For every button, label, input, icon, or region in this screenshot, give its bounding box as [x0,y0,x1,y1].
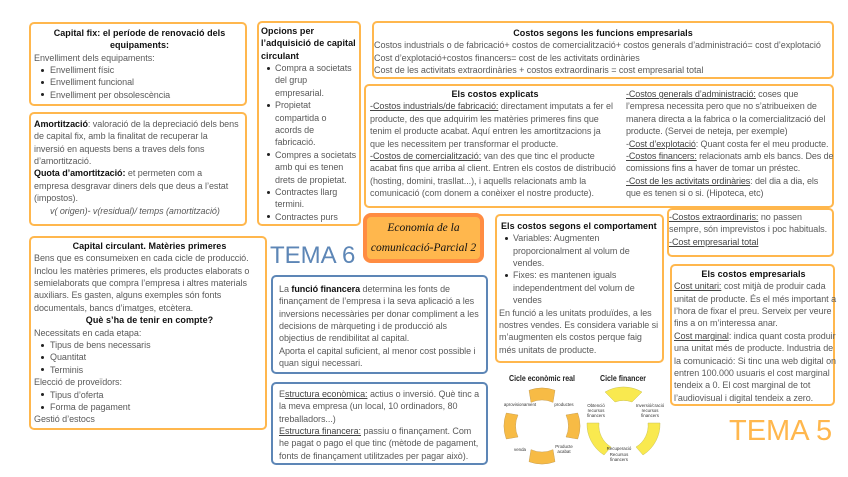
panel: opcions adquisició: amb qui es tenen [275,162,343,172]
panel: costos segons el comportament: Fixes: es mantenen iguals [513,270,616,280]
heading: capital fix: equipaments: [110,40,169,50]
chart: cicle financer: Recuperació [607,446,632,451]
column: explicats esquerra [370,89,616,198]
panel: opcions adquisició: compartida o [275,113,326,123]
panel: opcions adquisició: Propietat [275,100,311,110]
chart: cicle econòmic real: productes [554,402,574,407]
panel: opcions adquisició: empresarial. [275,88,324,98]
panel: capital circulant: documentals, bancs d’imatges, etcètera. [34,303,193,313]
heading: capital fix [54,28,225,50]
chart: cicle econòmic real: acabat [557,449,571,454]
list: envelliment: Envelliment funcional [50,77,134,87]
panel: amortització: Quota d’amortització: et permeten com a [34,168,202,178]
panel: costos segons el comportament: m’augmenten els costos perque faig [499,332,642,342]
panel: els costos empresarials: l’hora de fixar el preu. Serveix per veure [674,306,831,316]
heading: opcions: circulant [261,51,299,61]
panel: costos segons el comportament: independentment del volum de [513,283,635,293]
panel: opcions adquisició: Contractes purs [275,212,338,222]
column: explicats esquerra: -Costos industrials/de fabricació: directament imputats a fer el [370,101,613,111]
panel: opcions adquisició: Compres a societats [275,150,356,160]
panel: estructura econòmica i financera: Estructura financera: passiu o finançament. Com [279,426,471,436]
panel: costos segons les funcions empresarials: Cost de les activitats extraordinàries + costos extraordinaris = cost empresarial total [374,65,703,75]
heading: comportament: Els costos segons el comportament [501,221,657,231]
chart: cicle financer: Inversió/cració [636,403,665,408]
panel: opcions adquisició: Compra a societats [275,63,352,73]
panel: amortització: v( origen)- v(residual)/ temps (amortització) [50,206,220,216]
list: envelliment: Envelliment per obsolescència [50,90,170,100]
title: economia de la comunicació: Economia de la [387,222,460,234]
panel: capital circulant [29,236,267,430]
heading: costos empresarials: Els costos empresarials [701,269,806,279]
panel: opcions adquisició: acords de [275,125,314,135]
panel: capital circulant: Necessitats en cada etapa: [34,328,141,338]
panel: costos extraordinaris: sempre, són imprevistos i poc habituals. [669,224,827,234]
panel: amortització: (impostos). [34,193,78,203]
chart: cicle financer: financers [610,457,629,462]
panel: capital circulant: semielaborats que compra l’empresa i altres materials [34,278,247,288]
heading: cicle econòmic real: Cicle econòmic real [509,373,575,383]
panel: els costos empresarials: unitat de producte. És el més important a [674,294,836,304]
panel: capital circulant: Tipus d’oferta [50,390,104,400]
panel: funció financera: inversions necessàries per donar compliment a les [279,309,479,319]
heading: capital fix: Capital fix: el període de renovació dels [54,28,225,38]
chart: cicle financer: financers [587,413,606,418]
heading: opcions: Opcions per [261,26,314,36]
panel: costos extraordinaris: -Cost empresarial total [669,237,758,247]
column: explicats dreta: producte. (Servei de neteja, per exemple) [626,126,788,136]
heading: opcions: l’adquisició de capital [261,38,356,48]
chart: cicle financer: financers [641,413,660,418]
heading: tema 6: TEMA 6 [270,242,355,269]
panel: funció financera [271,275,488,374]
panel: costos segons el comportament: proporcionalment al volum de [513,246,630,256]
column: explicats esquerra: tenim el producte acabat. Aquí entren les amortitzacions ja [370,126,601,136]
column: explicats dreta: que es tenen si o si. (Hipoteca, etc) [626,188,763,198]
panel: costos segons el comportament: més unitats de producte. [499,345,596,355]
chart: cicle econòmic real [504,373,580,464]
column: explicats dreta: manera directa a la fabrica o la comercialització del [626,114,825,124]
chart: cicle econòmic real: venda [514,447,527,452]
panel: funció financera: Aporta el capital suficient, al menor cost possible i [279,346,475,356]
chart: cicle econòmic real: Producte [555,444,573,449]
panel: costos extraordinaris [667,208,834,257]
chart: cicle financer: Obtenció [587,403,605,408]
column: explicats dreta: comissions fins a haver de tomar un préstec. [626,163,800,173]
heading: cicle financer: Cicle financer [600,373,647,383]
panel: els costos empresarials: Cost unitari: cost mitjà de produir cada [674,281,826,291]
panel: capital circulant: Quantitat [50,352,86,362]
chart: cicle financer [587,373,665,462]
panel: estructura econòmica i financera [271,382,488,465]
panel: opcions adquisició [257,21,361,226]
panel: costos segons el comportament: Variables: Augmenten [513,233,599,243]
panel: els costos empresarials: Cost marginal: indica quant costa produir [674,331,836,341]
panel: estructura econòmica i financera: treballadors...) [279,414,336,424]
panel: funció financera: quan sigui necessari. [279,358,363,368]
panel: capital circulant: Inclou les matèries primeres, els productes elaborats o [34,266,249,276]
column: explicats dreta: -Costos generals d’administració: coses que [626,89,798,99]
heading: opcions [261,26,356,61]
list: envelliment [41,65,170,100]
panel: els costos empresarials [670,264,835,406]
panel: els costos empresarials: fins a on m’interessa anar. [674,318,778,328]
heading: tema 5: TEMA 5 [729,415,832,447]
panel: opcions adquisició: del grup [275,75,307,85]
panel: opcions adquisició: termini. [275,199,304,209]
panel: costos segons el comportament: nostres vendes. Es considera variable si [499,320,658,330]
column: explicats dreta: -Cost de les activitats ordinàries: del dia a dia, els [626,176,818,186]
panel: els costos empresarials: l’audiovisual i digital tendeix a zero. [674,393,813,403]
panel: capital circulant: Forma de pagament [50,402,130,412]
chart: cicle financer: Recursos [610,452,629,457]
panel: costos segons les funcions empresarials [372,21,834,79]
column: explicats esquerra: que les necessitem per transformar el producte. [370,139,558,149]
panel: funció financera: La funció financera determina les fonts de [279,284,450,294]
panel: costos segons el comportament [495,214,664,363]
panel: capital circulant: Elecció de proveïdors: [34,377,122,387]
panel: costos segons les funcions empresarials: Cost d’explotació+costos financers= cost de les activitats ordinàries [374,53,640,63]
panel: els costos empresarials: tendeix a 0. El cost marginal de tot [674,380,810,390]
panel: capital circulant: Tipus de bens necessaris [50,340,151,350]
column: explicats esquerra: -Costos de comercialització: van des que tinc el producte [370,151,595,161]
panel: capital circulant: Gestió d’estocs [34,414,95,424]
panel: estructura econòmica i financera: la meva empresa (un local, 10 ordinadors, 80 [279,401,457,411]
panel: els costos empresarials: la comunicació: Si tinc una web digital on [674,356,836,366]
panel: estructura econòmica i financera: Estructura econòmica: actius o inversió. Què tinc a [279,389,479,399]
heading: què s'ha de tenir en compte: Què s’ha de tenir en compte? [86,315,213,325]
title: economia de la comunicació: comunicació-Parcial 2 [371,242,476,254]
panel: costos segons el comportament: vendes. [513,258,544,268]
heading: costos explicats: Els costos explicats [451,89,539,99]
panel: els costos empresarials: una unitat més de producte. Industria de [674,343,833,353]
heading: costos funcions: Costos segons les funcions empresarials [513,28,693,38]
panel: opcions adquisició: drets de propietat. [275,175,347,185]
column: explicats esquerra: acabat fins que arriba al client. Entren els costos de distribució [370,163,616,173]
panel: els costos explicats [364,84,834,208]
panel: funció financera: objectius de rendibilitat al capital. [279,333,409,343]
panel: costos segons el comportament: vendes [513,295,542,305]
panel: amortització: empresa desgravar diners dels que deus a l’estat [34,181,228,191]
column: explicats dreta: -Costos financers: relacionats amb els bancs. Des de [626,151,833,161]
column: explicats esquerra: producte, des que adquirim les matèries primeres fins que [370,114,599,124]
text: envelliment: Envelliment dels equipaments: [34,53,155,63]
column: explicats dreta: -Cost d’explotació: Quant costa fer el meu producte. [626,139,828,149]
title: economia de la comunicació [363,213,484,263]
panel: estructura econòmica i financera: he pagat o pago el que tinc (mètode de pagament, [279,438,478,448]
column: explicats dreta: l’empresa necessita pero que no s’atribueixen de [626,101,817,111]
chart: cicle financer: recursos [588,408,605,413]
chart: cicle econòmic real: aprovisionament [504,402,537,407]
panel: amortització [29,112,247,226]
panel: amortització: inversió en aquests bens a traves dels fons [34,144,204,154]
panel: costos segons el comportament: En funció a les unitats produïdes, a les [499,308,652,318]
list: envelliment: Envelliment físic [50,65,114,75]
panel: opcions adquisició: fabricació. [275,137,315,147]
column: explicats esquerra: (hosting, domini, trasllat...), i aquells relacionats amb la [370,176,586,186]
heading: capital circulant: Capital circulant. Matèries primeres [73,241,226,251]
panel: costos segons les funcions empresarials: Costos industrials o de fabricació+ costos de comercialització+ costos generals d’administració= cost d’explotació [374,40,821,50]
panel: funció financera: decisions de màrqueting i de producció als [279,321,447,331]
panel: capital circulant: Terminis [50,365,83,375]
panel: amortització: d’amortització. [34,156,91,166]
panel: costos extraordinaris: -Costos extraordinaris: no passen [669,212,802,222]
panel: opcions adquisició: Contractes llarg [275,187,337,197]
panel: amortització: de capital fix, amb la finalitat de recuperar la [34,131,208,141]
panel: funció financera: finançament de l’empresa i la seva aplicació a les [279,296,474,306]
panel: capital circulant: Bens que es consumeixen en cada cicle de producció. [34,253,249,263]
chart: cicles econòmic i financer [504,373,665,464]
chart: cicle financer: recursos [642,408,659,413]
column: explicats dreta [626,89,834,198]
panel: amortització: Amortització: valoració de la depreciació dels bens [34,119,239,129]
panel: estructura econòmica i financera: fonts de finançament utilitzades per pagar això). [279,451,468,461]
panel: els costos empresarials: entren 100.000 usuaris el cost marginal [674,368,830,378]
column: explicats esquerra: comunicació (com donem a conèixer el nostre producte). [370,188,594,198]
panel: capital fix [29,22,247,106]
panel: capital circulant: auxiliars. Es gasten, alguns exemples són fonts [34,290,221,300]
